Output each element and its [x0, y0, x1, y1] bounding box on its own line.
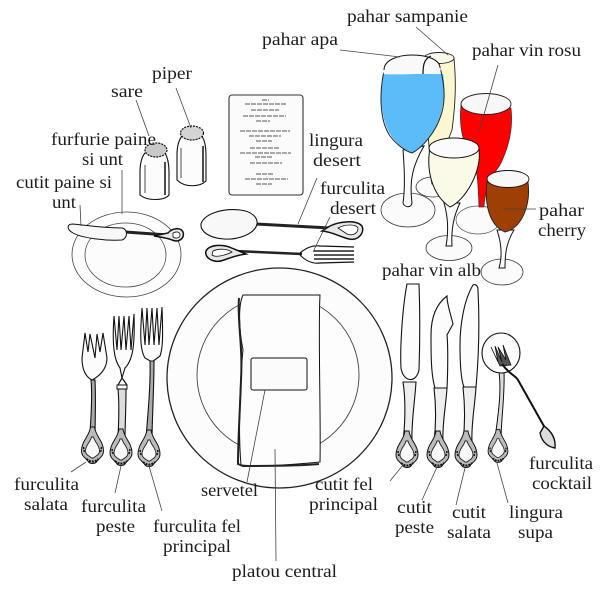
label: cutit paine si unt: cutit paine si [16, 172, 112, 192]
label: cutit salata: salata [447, 522, 491, 542]
label: cutit peste: cutit [397, 497, 432, 517]
label: furculita cocktail [529, 453, 593, 493]
cocktail fork [491, 345, 555, 448]
label: cutit peste: peste [395, 517, 434, 537]
label: furculita peste [81, 496, 146, 536]
fish fork [110, 314, 134, 466]
label: lingura desert: lingura [309, 130, 363, 150]
label: cutit fel principal: principal [309, 494, 378, 514]
label: furculita desert [320, 178, 385, 218]
label: lingura desert [309, 130, 363, 170]
label: furculita salata [14, 474, 79, 514]
label: furculita fel principal: principal [163, 536, 231, 556]
butter knife [68, 224, 183, 241]
soup spoon [482, 333, 520, 462]
label: pahar cherry [538, 200, 586, 240]
label: furculita cocktail: furculita [529, 453, 593, 473]
sherry glass [481, 170, 529, 285]
label: pahar cherry: cherry [538, 220, 586, 240]
label: pahar sampanie: pahar sampanie [347, 6, 468, 26]
label: servetel: servetel [201, 480, 258, 500]
label: cutit salata: cutit [452, 502, 486, 522]
label: lingura supa: supa [518, 522, 553, 542]
label: cutit fel principal [309, 474, 378, 514]
salad fork [82, 333, 107, 464]
salt shaker [140, 143, 169, 200]
label: lingura desert: desert [313, 150, 361, 170]
label: pahar vin rosu: pahar vin rosu [472, 40, 581, 60]
label: farfurie paine si unt [51, 129, 156, 169]
fish knife [427, 296, 453, 468]
main plate [167, 268, 392, 488]
label: lingura supa: lingura [509, 502, 563, 522]
label: furculita desert: furculita [320, 178, 385, 198]
place card [251, 358, 307, 390]
dinner knife [396, 284, 420, 468]
label: lingura supa [509, 502, 563, 542]
dinner fork [138, 307, 163, 466]
label: cutit fel principal: cutit fel [315, 474, 373, 494]
champagne glass [416, 52, 455, 197]
label: furculita salata: salata [24, 494, 68, 514]
label: platou central: platou central [232, 561, 337, 581]
label: farfurie paine si unt: si unt [82, 149, 123, 169]
salad knife [455, 285, 479, 468]
label: furculita peste: peste [96, 516, 135, 536]
label: pahar vin alb: pahar vin alb [382, 260, 481, 280]
label: furculita peste: furculita [81, 496, 146, 516]
label: piper: piper [152, 63, 192, 83]
label: pahar cherry: pahar [539, 200, 584, 220]
pepper shaker [177, 126, 206, 186]
label: farfurie paine si unt: furfurie paine [51, 129, 156, 149]
dessert spoon [201, 210, 363, 239]
label: cutit paine si unt [16, 172, 112, 212]
label: furculita fel principal [153, 516, 241, 556]
menu card [229, 95, 303, 195]
label: furculita fel principal: furculita fel [153, 516, 241, 536]
red wine glass [456, 94, 512, 234]
label: furculita desert: desert [330, 198, 376, 218]
label: sare: sare [111, 81, 143, 101]
label: furculita salata: furculita [14, 474, 79, 494]
white wine glass [426, 138, 479, 260]
label: cutit peste [395, 497, 434, 537]
label: pahar apa: pahar apa [262, 29, 338, 49]
napkin [238, 295, 320, 466]
label: cutit paine si unt: unt [52, 192, 76, 212]
dessert fork [206, 245, 354, 263]
leader lines [71, 27, 536, 561]
bread plate [72, 212, 181, 297]
label: cutit salata [447, 502, 491, 542]
water glass [381, 55, 444, 227]
label: furculita cocktail: cocktail [532, 473, 592, 493]
